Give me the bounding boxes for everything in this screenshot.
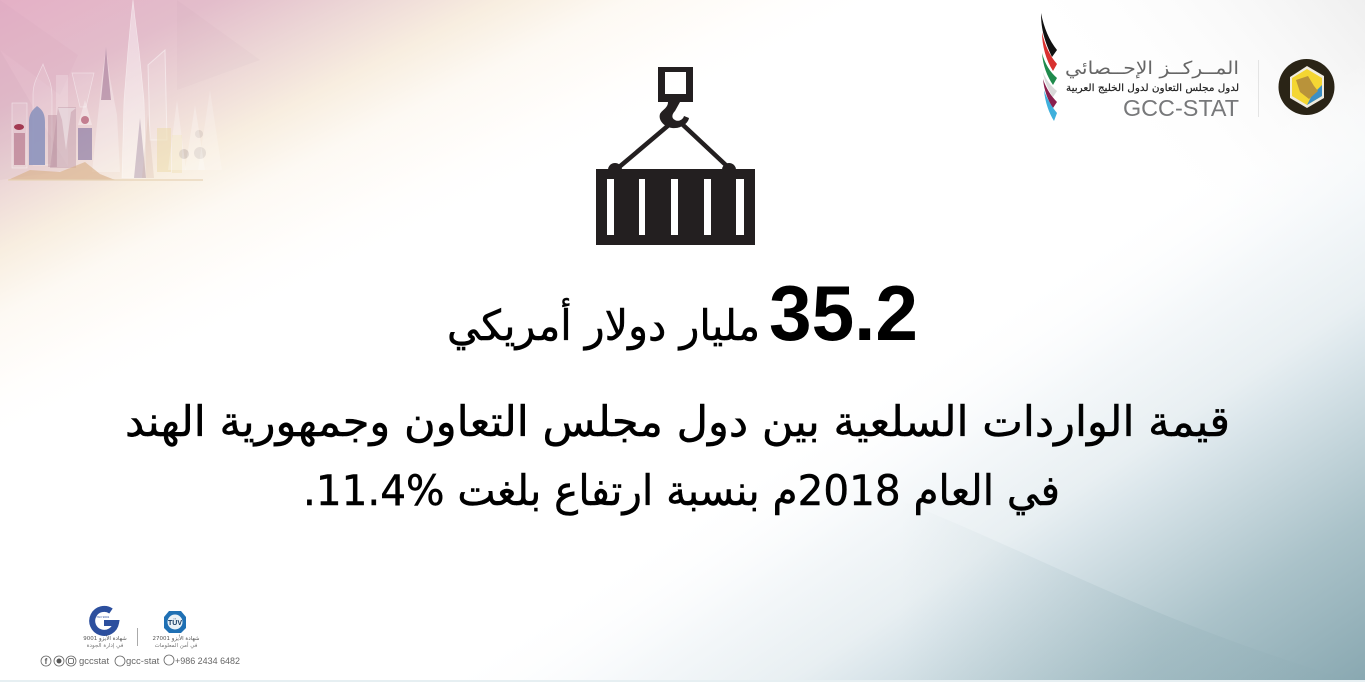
unit: مليار دولار أمريكي	[447, 298, 760, 351]
certificates: في إدارة الجودة	[87, 643, 124, 649]
headline figure	[447, 269, 918, 357]
globe tower	[78, 128, 92, 160]
hook block	[658, 67, 693, 102]
blue tower	[29, 106, 45, 165]
illustration: Gulf city skyline	[8, 0, 222, 181]
social media contacts: +986 2434 6482	[175, 656, 240, 667]
social media contacts: f	[45, 657, 48, 666]
Burj tower	[122, 0, 146, 178]
ISO 9001 caption: شهادة الأيزو 9001	[83, 634, 127, 642]
yellow towers	[157, 128, 171, 172]
Arabic subtitle: لدول مجلس التعاون لدول الخليج العربية	[1066, 83, 1239, 94]
line two: في العام 2018م بنسبة ارتفاع بلغت %11.4.	[303, 466, 1060, 516]
outlined glass towers	[148, 50, 167, 140]
Latin name: GCC-STAT	[1123, 95, 1239, 121]
arch tower	[50, 107, 76, 168]
number: 35.2	[769, 269, 918, 357]
outlined towers	[12, 103, 27, 168]
desert base	[8, 162, 115, 180]
description text	[125, 397, 1230, 516]
hook	[660, 102, 689, 128]
Arabic name: المــركــز الإحــصائي	[1065, 58, 1239, 79]
social media contacts	[41, 655, 240, 667]
ISO 9001 badge: ISO 9001	[97, 615, 110, 619]
logo: GCC-STAT	[1041, 13, 1239, 121]
spire tower	[92, 47, 120, 172]
ISO 27001 caption: شهادة الأيزو 27001	[152, 634, 200, 642]
red tower	[14, 133, 25, 165]
logo: GCC emblem	[1258, 59, 1334, 117]
social media contacts: gcc-stat	[126, 656, 160, 667]
line one: قيمة الواردات السلعية بين دول مجلس التعاون وجمهورية الهند	[125, 397, 1230, 447]
social media contacts: gccstat	[79, 656, 109, 667]
ISO 27001 badge: TÜV	[168, 618, 182, 627]
slings	[618, 124, 729, 168]
certificates: في أمن المعلومات	[155, 641, 198, 649]
certificates	[83, 609, 200, 649]
ribbon mark	[1041, 13, 1057, 121]
icon: container hanging from a crane hook	[596, 67, 755, 245]
container	[596, 169, 755, 245]
